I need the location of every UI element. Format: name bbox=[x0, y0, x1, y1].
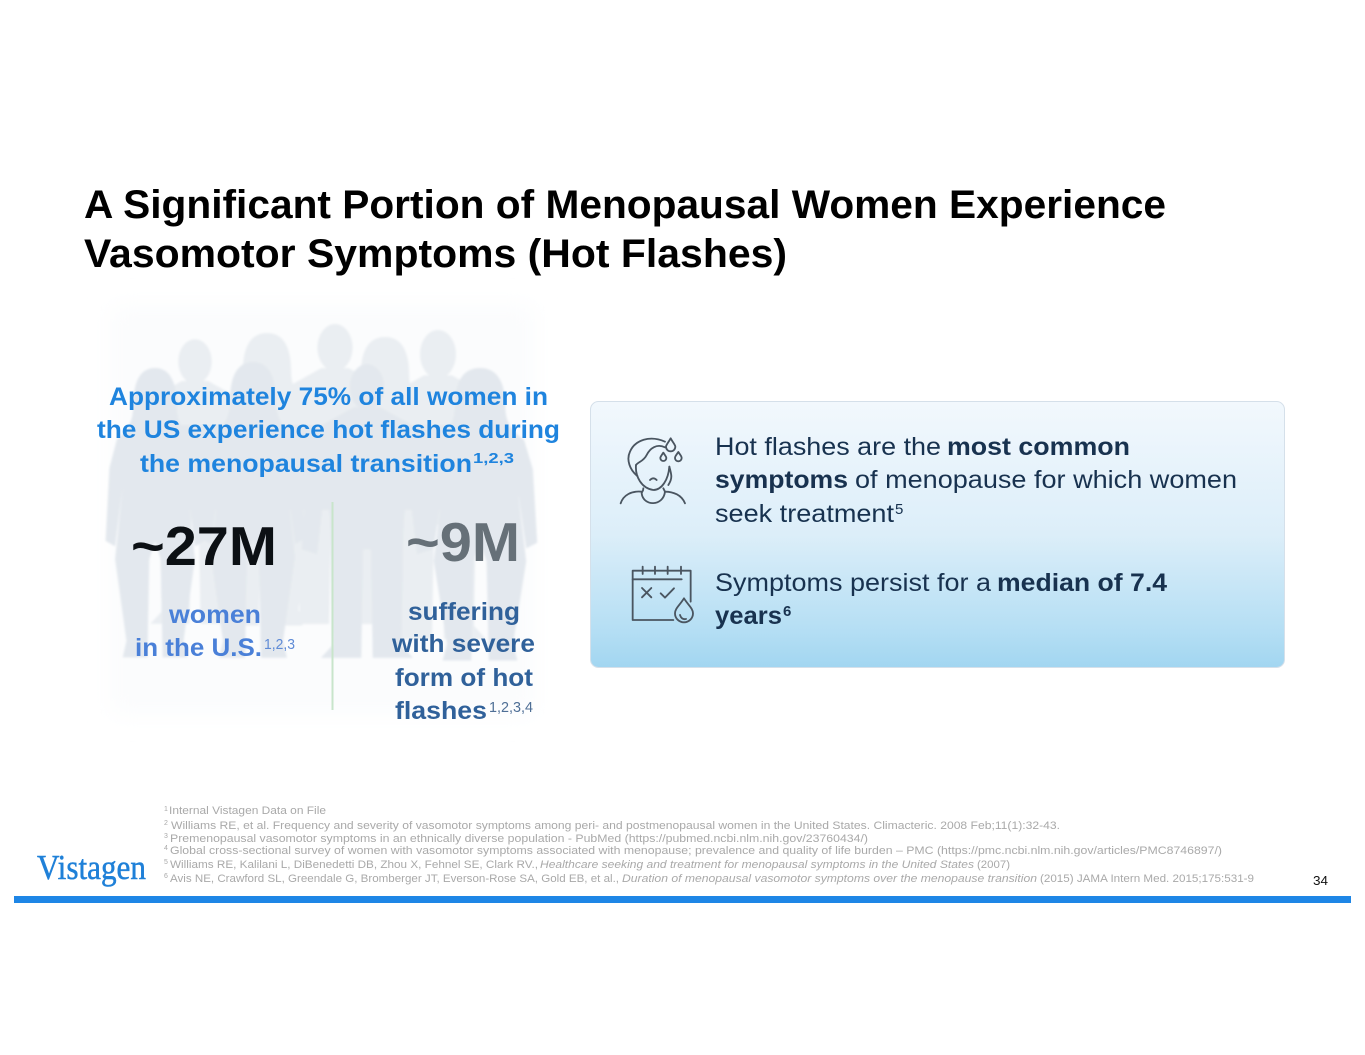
footnotes: 3 bbox=[164, 833, 168, 840]
text: most common symptoms: of menopause for which women bbox=[855, 466, 1237, 494]
stat: 9M severe: form of hot bbox=[395, 664, 534, 692]
footnotes: Premenopausal vasomotor symptoms in an ethnically diverse population - PubMed (https://pubmed.ncbi.nlm.nih.gov/23760434/) bbox=[170, 833, 868, 845]
stat: 9M severe: suffering bbox=[408, 598, 520, 626]
logo: Vistagen: Vistagen bbox=[37, 848, 146, 887]
stat: 9M severe: flashes bbox=[395, 697, 487, 725]
footnotes: Global cross-sectional survey of women with vasomotor symptoms associated with menopause; prevalence and quality of life burden – PMC (https://pmc.ncbi.nlm.nih.gov/articles/PMC8746897/) bbox=[170, 845, 1222, 857]
divider bbox=[332, 502, 334, 710]
stat: 9M severe: ~9M bbox=[406, 511, 520, 573]
footnotes: Duration of menopausal vasomotor symptoms over the menopause transition bbox=[622, 873, 1037, 885]
stat: 27M women: in the U.S. bbox=[135, 634, 262, 662]
heading: 75% of women: the menopausal transition bbox=[140, 450, 472, 478]
stat: 9M severe: 1,2,3,4 bbox=[489, 699, 533, 716]
page number: 34 bbox=[1313, 873, 1328, 888]
footnotes bbox=[164, 805, 1254, 885]
footnotes: 6 bbox=[164, 873, 168, 880]
title: A Significant Portion of Menopausal Women Experience bbox=[84, 183, 1166, 227]
text: median duration: Symptoms persist for a bbox=[715, 569, 991, 597]
text: most common symptoms: Hot flashes are the bbox=[715, 433, 941, 461]
text: most common symptoms: most common bbox=[947, 433, 1130, 461]
heading: 75% of women: Approximately 75% of all women in bbox=[109, 383, 548, 411]
footnotes: Williams RE, Kalilani L, DiBenedetti DB, Zhou X, Fehnel SE, Clark RV., bbox=[170, 859, 538, 871]
footnotes: Healthcare seeking and treatment for menopausal symptoms in the United States bbox=[540, 859, 975, 871]
title bbox=[84, 183, 1166, 276]
icon: woman with sweat drops bbox=[621, 438, 685, 503]
stat: 27M women: 1,2,3 bbox=[264, 636, 295, 653]
footer bar bbox=[14, 896, 1351, 903]
footnotes: 2 bbox=[164, 820, 168, 827]
text: most common symptoms bbox=[715, 433, 1237, 528]
footnotes: 5 bbox=[164, 859, 168, 866]
stat: 27M women: women bbox=[168, 601, 261, 629]
panel: symptoms bbox=[590, 402, 1284, 668]
footnotes: Avis NE, Crawford SL, Greendale G, Bromberger JT, Everson-Rose SA, Gold EB, et al., bbox=[170, 873, 619, 885]
text: most common symptoms: symptoms bbox=[715, 466, 848, 494]
text: median duration: years bbox=[715, 602, 782, 630]
footnotes: (2015) JAMA Intern Med. 2015;175:531-9 bbox=[1040, 873, 1254, 885]
stat: 9M severe: with severe bbox=[391, 630, 535, 658]
heading: 75% of women bbox=[97, 383, 560, 478]
stat: 27M women bbox=[131, 515, 295, 662]
footnotes: 4 bbox=[164, 845, 168, 852]
footnotes: Internal Vistagen Data on File bbox=[169, 805, 326, 817]
stat: 27M women: ~27M bbox=[131, 515, 277, 577]
heading: 75% of women: 1,2,3 bbox=[473, 450, 514, 467]
footnotes: Williams RE, et al. Frequency and severity of vasomotor symptoms among peri- and postmenopausal women in the United States. Climacteric. 2008 Feb;11(1):32-43. bbox=[171, 820, 1060, 832]
text: most common symptoms: 5 bbox=[895, 501, 903, 518]
title: Vasomotor Symptoms (Hot Flashes) bbox=[84, 232, 787, 276]
text: median duration: median of 7.4 bbox=[997, 569, 1167, 597]
text: median duration bbox=[715, 569, 1167, 630]
stat: 9M severe bbox=[391, 511, 535, 725]
footnotes: 1 bbox=[164, 806, 168, 813]
icon: calendar with drop bbox=[633, 567, 693, 622]
heading: 75% of women: the US experience hot flashes during bbox=[97, 416, 560, 444]
text: most common symptoms: seek treatment bbox=[715, 500, 894, 528]
silhouette group of people bbox=[106, 305, 537, 715]
text: median duration: 6 bbox=[783, 603, 791, 620]
footnotes: (2007) bbox=[977, 859, 1010, 871]
